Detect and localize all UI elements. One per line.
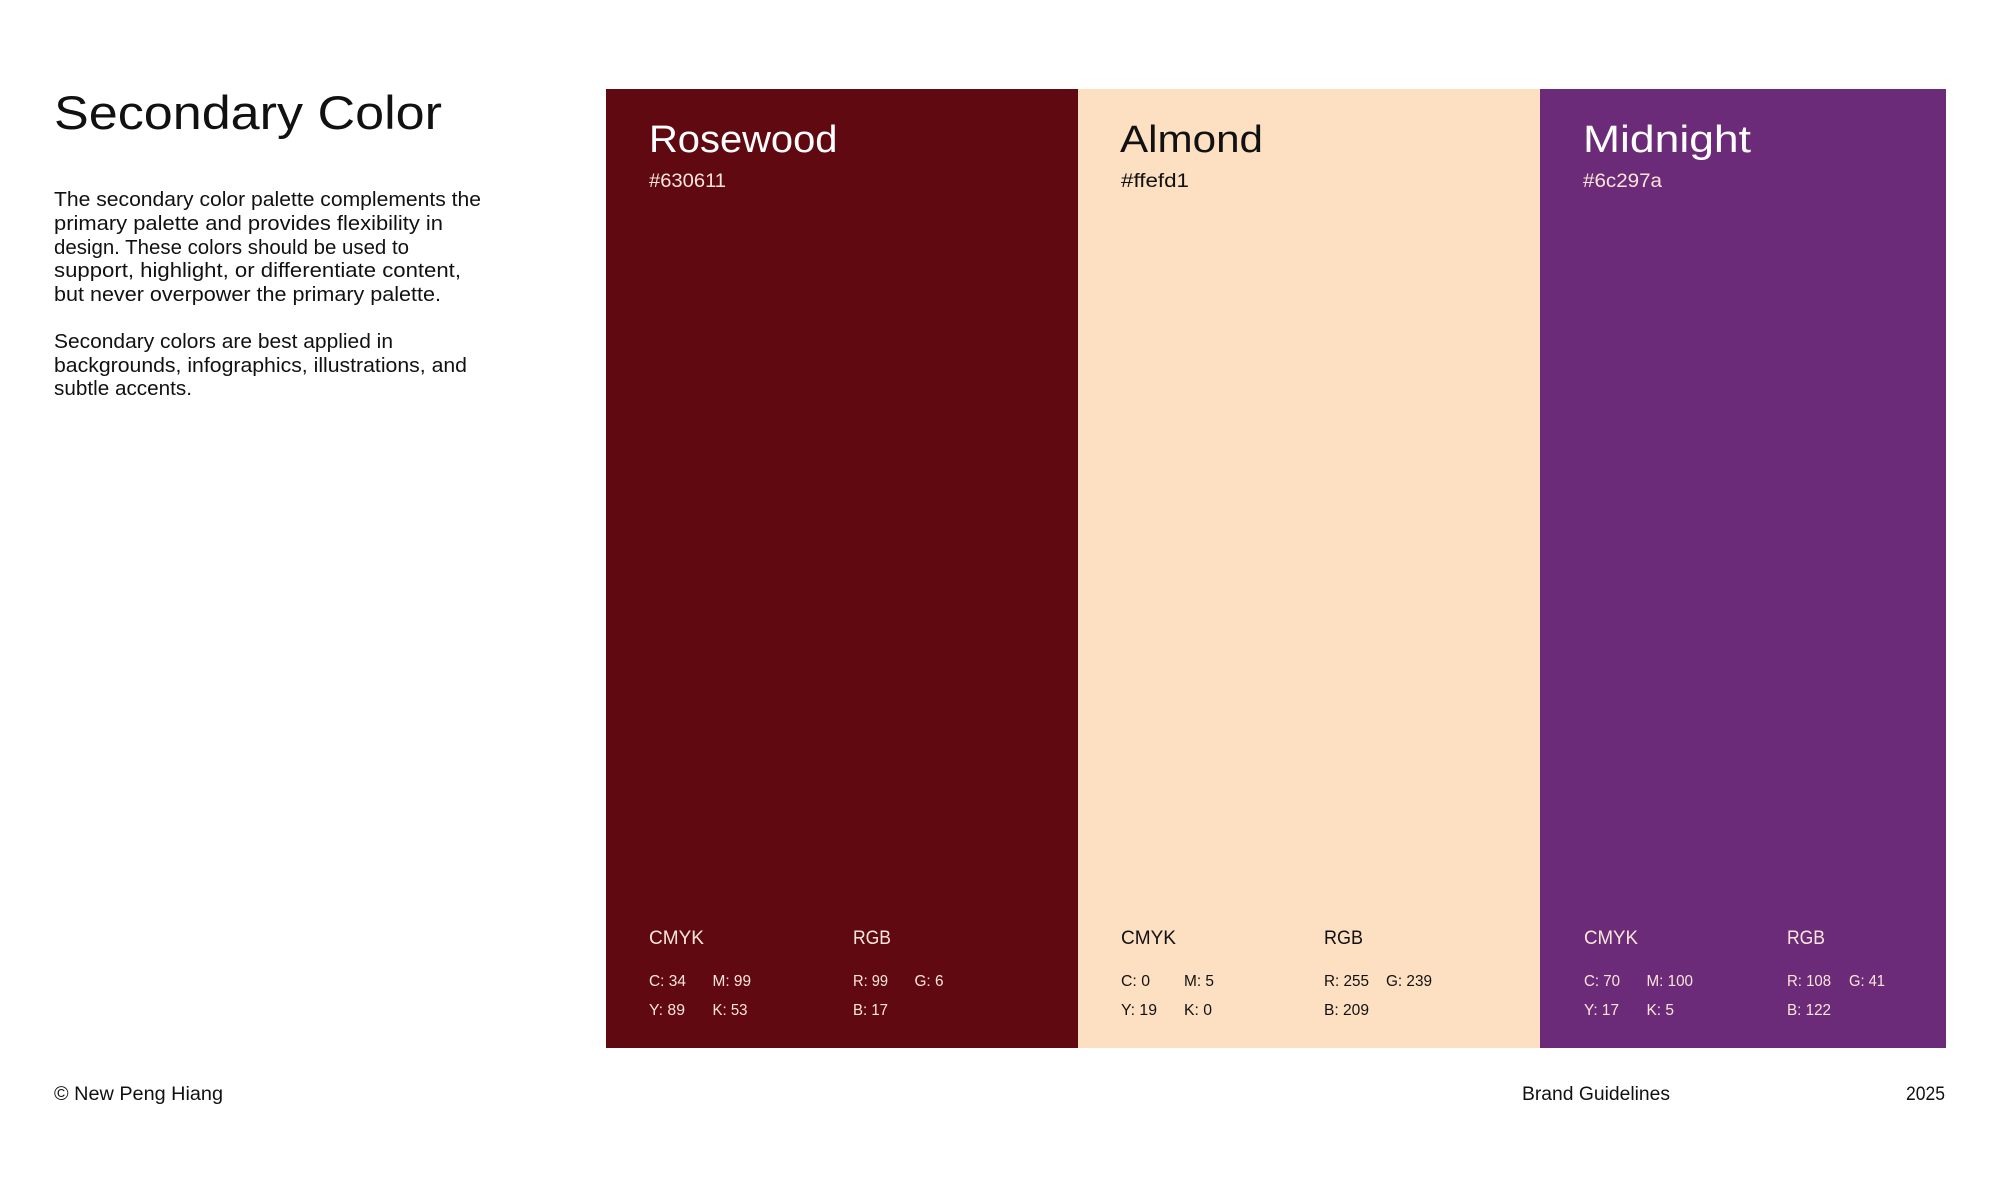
CMYK values: Midnight: M: 100: [1646, 973, 1693, 990]
CMYK values: Rosewood: CMYK: [649, 928, 704, 949]
RGB values: Almond: G: 239: [1386, 973, 1432, 990]
CMYK values: Rosewood: C: 34: [649, 973, 686, 990]
RGB values: Rosewood: RGB: [853, 928, 891, 949]
CMYK values: Midnight: [1584, 928, 1693, 1019]
RGB values: Almond: [1324, 928, 1432, 1019]
RGB values: Midnight: RGB: [1787, 928, 1825, 949]
CMYK values: Rosewood: [649, 928, 751, 1019]
RGB values: Almond: B: 209: [1324, 1002, 1369, 1019]
CMYK values: Almond: M: 5: [1184, 973, 1214, 990]
hex code: Rosewood: #630611: [649, 171, 726, 192]
footer: document name: Brand Guidelines: [1522, 1084, 1670, 1105]
RGB values: Rosewood: R: 99: [853, 973, 888, 990]
RGB values: Rosewood: G: 6: [914, 973, 944, 990]
CMYK values: Almond: [1121, 928, 1214, 1019]
color name: Almond: Almond: [1120, 119, 1263, 161]
CMYK values: Rosewood: M: 99: [712, 973, 751, 990]
RGB values: Midnight: R: 108: [1787, 973, 1831, 990]
footer: copyright: © New Peng Hiang: [54, 1084, 223, 1105]
usage text block: [54, 331, 467, 400]
title: Secondary Color: [54, 86, 442, 139]
CMYK values: Midnight: K: 5: [1646, 1002, 1674, 1019]
CMYK values: Almond: CMYK: [1121, 928, 1176, 949]
RGB values: Midnight: G: 41: [1849, 973, 1885, 990]
intro text block: support, highlight, or differentiate content,: [54, 260, 461, 282]
usage text block: Secondary colors are best applied in: [54, 331, 393, 353]
panel: Almond: [1078, 89, 1540, 1048]
RGB values: Almond: R: 255: [1324, 973, 1369, 990]
color name: Midnight: Midnight: [1583, 119, 1752, 161]
CMYK values: Almond: K: 0: [1184, 1002, 1212, 1019]
intro text block: but never overpower the primary palette.: [54, 284, 441, 306]
footer: year: 2025: [1906, 1084, 1945, 1105]
RGB values: Almond: RGB: [1324, 928, 1363, 949]
RGB values: Midnight: [1787, 928, 1885, 1019]
RGB values: Rosewood: B: 17: [853, 1002, 888, 1019]
color name: Rosewood: Rosewood: [649, 119, 838, 161]
CMYK values: Rosewood: K: 53: [712, 1002, 748, 1019]
CMYK values: Midnight: C: 70: [1584, 973, 1620, 990]
CMYK values: Almond: Y: 19: [1121, 1002, 1157, 1019]
panel: Rosewood: [606, 89, 1078, 1048]
intro text block: [54, 189, 481, 306]
hex code: Almond: #ffefd1: [1121, 171, 1189, 192]
RGB values: Midnight: B: 122: [1787, 1002, 1831, 1019]
intro text block: primary palette and provides flexibility in: [54, 213, 443, 235]
swatch: Rosewood: [606, 89, 1078, 1048]
usage text block: backgrounds, infographics, illustrations, and: [54, 355, 467, 377]
CMYK values: Rosewood: Y: 89: [649, 1002, 685, 1019]
RGB values: Rosewood: [853, 928, 944, 1019]
intro text block: design. These colors should be used to: [54, 237, 409, 259]
CMYK values: Midnight: Y: 17: [1584, 1002, 1619, 1019]
swatch: Midnight: [1540, 89, 1946, 1048]
panel: Midnight: [1540, 89, 1946, 1048]
CMYK values: Almond: C: 0: [1121, 973, 1150, 990]
hex code: Midnight: #6c297a: [1583, 171, 1662, 192]
usage text block: subtle accents.: [54, 378, 192, 400]
intro text block: The secondary color palette complements the: [54, 189, 481, 211]
swatch: Almond: [1078, 89, 1540, 1048]
CMYK values: Midnight: CMYK: [1584, 928, 1638, 949]
